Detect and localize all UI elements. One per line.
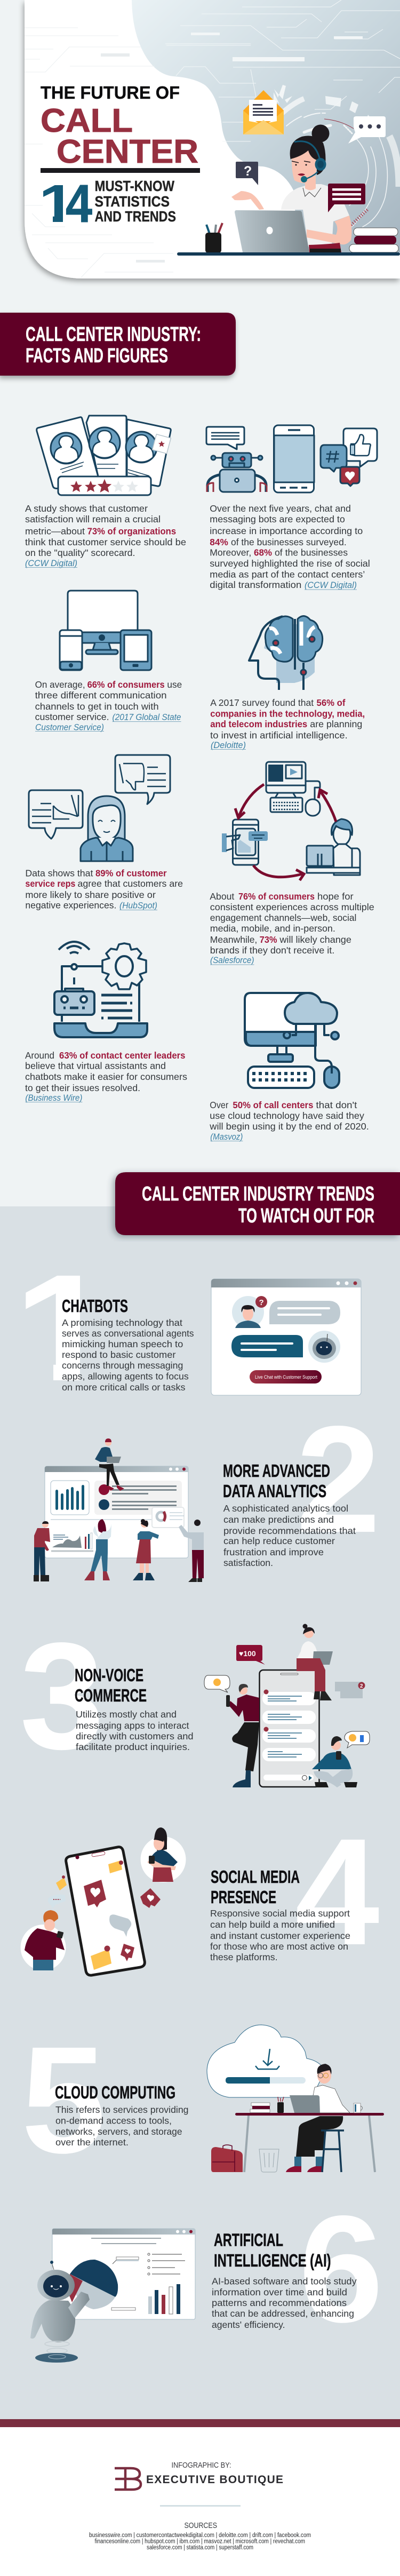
text block: (Masvoz) — [210, 1132, 243, 1142]
text block: This refers to services providing — [55, 2104, 189, 2115]
credit label: INFOGRAPHIC BY: — [172, 2461, 231, 2470]
text block: 89% of customer — [95, 868, 167, 878]
heading: NON-VOICE — [75, 1665, 143, 1685]
text block: agents' efficiency. — [212, 2319, 285, 2330]
text block: 84% — [210, 537, 228, 547]
text block: for those who are most active on — [210, 1941, 348, 1952]
man pointing — [179, 1520, 204, 1582]
text block: to invest in artificial intelligence. — [210, 730, 348, 741]
heading: SOCIAL MEDIA — [211, 1867, 300, 1887]
circuit decoration — [25, 0, 400, 277]
banner: facts heading — [0, 313, 236, 376]
illustration: agent — [231, 125, 351, 252]
heart notification: ♥100 — [239, 1649, 256, 1658]
text block: use cloud technology have said they — [210, 1110, 364, 1121]
title: MUST-KNOW — [95, 178, 174, 194]
banner: facts heading: CALL CENTER INDUSTRY: — [26, 323, 201, 346]
icon: books — [349, 228, 398, 252]
panel: channels fact — [35, 591, 182, 732]
text block: can help reduce customer — [223, 1536, 335, 1546]
text block: that can be addressed, enhancing — [212, 2308, 354, 2319]
desk — [235, 2113, 384, 2172]
text block: 73% — [260, 934, 277, 945]
illustration: chat window: ? — [259, 1298, 264, 1307]
text block — [55, 2104, 189, 2148]
illustration: social phone — [20, 1827, 186, 1975]
text block: 63% of contact center leaders — [59, 1050, 186, 1061]
sources heading: SOURCES — [185, 2521, 217, 2530]
woman seated on phone — [297, 1624, 333, 1700]
text block: messaging apps to interact — [76, 1720, 189, 1731]
sources list: businesswire.com | customercontactweekdigital.com | deloitte.com | drift.com | facebook.com — [89, 2532, 311, 2539]
text block: AI-based software and tools study — [212, 2276, 357, 2287]
woman in skirt — [133, 1519, 159, 1580]
cloud with download — [207, 2025, 325, 2097]
arrows: maroon cycle — [235, 784, 336, 880]
text block: patterns and recommendations — [212, 2297, 347, 2308]
text block: think that customer service should be — [25, 537, 186, 547]
text block: provide recommendations that — [223, 1525, 356, 1536]
sources list: salesforce.com | statista.com | superstaff.com — [147, 2545, 253, 2551]
icon: reps and reviews — [29, 755, 170, 861]
man sitting on floor — [312, 1736, 357, 1787]
text block — [25, 503, 186, 568]
illustration: cloud worker — [207, 2025, 384, 2172]
text block: Data shows that — [25, 868, 93, 878]
text block: and instant customer experience — [210, 1930, 350, 1941]
text block: believe that virtual assistants and — [25, 1061, 166, 1071]
text block: information over time and build — [212, 2287, 347, 2297]
text block: on more critical calls or tasks — [62, 1382, 186, 1393]
text block: hope for — [317, 891, 354, 902]
text block — [209, 1100, 369, 1142]
phone — [66, 1847, 145, 1975]
text block: frustration and improve — [223, 1547, 324, 1557]
icon: bot, phone and social — [206, 425, 377, 492]
text block — [223, 1503, 356, 1568]
text block: these platforms. — [210, 1952, 278, 1962]
text block: Moreover, — [210, 547, 251, 558]
illustration: phone with people — [204, 1624, 370, 1787]
panel: AI investment fact — [210, 616, 365, 750]
number 1: 1 — [13, 1243, 115, 1413]
heading: CLOUD COMPUTING — [55, 2082, 175, 2102]
text block: 73% of organizations — [87, 526, 176, 537]
text block: Over the next five years, chat and — [210, 503, 351, 514]
panel: hero — [25, 0, 400, 279]
title: AND TRENDS — [95, 208, 176, 225]
heading: COMMERCE — [75, 1685, 147, 1705]
man at desk — [286, 2064, 350, 2172]
text block: on-demand access to tools, — [55, 2115, 172, 2126]
text block: (Business Wire) — [25, 1093, 82, 1103]
title: CENTER — [57, 133, 198, 170]
text block — [25, 868, 183, 910]
text block — [76, 1709, 194, 1752]
text block — [62, 1317, 194, 1393]
text block: satisfaction. — [223, 1557, 273, 1568]
panel: trend 1 chatbots — [26, 1275, 362, 1396]
text block: companies in the technology, media, — [210, 709, 365, 719]
hero card — [25, 0, 400, 279]
text block: chatbots make it easier for consumers — [25, 1071, 187, 1082]
text block: can help build a more unified — [210, 1919, 335, 1930]
books, cup and pens — [250, 2097, 363, 2113]
text block — [212, 2276, 357, 2330]
icon: rating cards — [37, 416, 171, 495]
icon: question bubble — [236, 162, 258, 185]
heading: ARTIFICIAL — [214, 2230, 283, 2249]
text block: About — [210, 891, 234, 902]
text block: (Deloitte) — [211, 741, 246, 750]
man on laptop — [95, 1438, 124, 1491]
text block: Around — [25, 1050, 54, 1061]
robot — [30, 2261, 90, 2363]
text block: 50% of call centers — [233, 1100, 314, 1110]
button — [250, 1370, 322, 1384]
text block: (CCW Digital) — [25, 559, 77, 568]
text block: on the "quality" scorecard. — [25, 547, 135, 558]
text block: channels to get in touch with — [35, 701, 159, 712]
text block — [210, 697, 365, 750]
text block: will begin using it by the end of 2020. — [209, 1121, 369, 1132]
text block: Responsive social media support — [210, 1908, 350, 1919]
heading — [211, 1867, 300, 1907]
text block: concerns through messaging — [62, 1360, 183, 1371]
icon: maroon message bubble — [328, 184, 365, 212]
envelope badge: 2 — [360, 1683, 363, 1689]
text block: On average, — [35, 679, 85, 690]
text block: serves as conversational agents — [62, 1328, 194, 1339]
logo name: EXECUTIVE BOUTIQUE — [146, 2474, 283, 2486]
text block: facilitate product inquiries. — [76, 1742, 190, 1752]
text block: increase in importance according to — [210, 526, 363, 536]
text block: mimicking human speech to — [62, 1339, 183, 1349]
heading: PRESENCE — [211, 1887, 276, 1907]
sources list: financesonline.com | hubspot.com | ibm.com | masvoz.net | microsoft.com | revechat.com — [95, 2539, 305, 2545]
phone — [259, 1670, 319, 1787]
text block: 76% of consumers — [238, 891, 315, 902]
panel: trend 2 analytics — [34, 1395, 381, 1582]
text block: that don't — [316, 1100, 357, 1110]
text block: Utilizes mostly chat and — [76, 1709, 177, 1720]
panel: trend 6 AI — [30, 2184, 383, 2363]
logo mark — [115, 2468, 141, 2490]
title — [41, 86, 200, 222]
text block: service reps — [25, 878, 76, 889]
icon: question bubble: ? — [244, 164, 252, 179]
illustration: chat window — [211, 1279, 361, 1395]
desk — [177, 252, 400, 256]
text block: agree that customers are — [78, 878, 183, 889]
text block: 56% of — [317, 697, 346, 708]
text block: engagement channels—web, social — [210, 912, 356, 923]
text block: 68% — [254, 547, 272, 558]
heading — [75, 1665, 147, 1705]
text block: messaging bots are expected to — [210, 514, 345, 524]
number 6: 6 — [299, 2184, 383, 2354]
heading: INTELLIGENCE (AI) — [214, 2251, 331, 2270]
banner: trends heading — [115, 1172, 400, 1235]
laptop on desk — [290, 2095, 320, 2113]
panel: trend 4 social media — [20, 1807, 380, 1977]
divider — [160, 2505, 241, 2507]
heading — [223, 1461, 330, 1501]
text block: negative experiences. — [25, 900, 116, 910]
text block: directly with customers and — [76, 1731, 194, 1742]
man with phone — [25, 1910, 65, 1970]
text block: can make predictions and — [223, 1514, 334, 1525]
title: 1 — [38, 174, 76, 234]
heading: DATA ANALYTICS — [223, 1481, 326, 1501]
panel: satisfaction fact — [25, 416, 186, 568]
sources list — [89, 2532, 311, 2551]
text block: and telecom industries — [210, 719, 307, 729]
title: STATISTICS — [95, 193, 170, 210]
woman with phone — [147, 1827, 178, 1882]
icon: dots bubble — [348, 116, 386, 144]
text block — [210, 891, 374, 965]
text block: surveyed highlighted the rise of social — [210, 558, 370, 569]
text block: Meanwhile, — [210, 934, 257, 945]
number 5: 5 — [21, 2015, 106, 2185]
text block: networks, servers, and storage — [55, 2126, 182, 2137]
bin — [259, 2149, 279, 2172]
text block: of the businesses — [275, 547, 348, 558]
text block: brands if they don't receive it. — [210, 945, 334, 956]
text block: 66% of consumers — [87, 679, 165, 690]
text block: (HubSpot) — [119, 901, 157, 910]
title: CALL — [41, 102, 133, 139]
text block — [25, 1050, 187, 1103]
icon: pen cup — [205, 223, 222, 253]
envelope badge — [335, 1682, 365, 1698]
woman reaching — [84, 1519, 111, 1580]
number 2: 2 — [296, 1395, 381, 1564]
text block: (Salesforce) — [210, 956, 254, 965]
man with chart — [34, 1521, 50, 1581]
emoji bubbles — [204, 1675, 370, 1748]
text block: (CCW Digital) — [305, 581, 357, 590]
text block — [210, 1908, 350, 1962]
text block: will likely change — [279, 934, 351, 945]
footer bar — [0, 2419, 400, 2427]
text block: satisfaction will remain a crucial — [25, 514, 161, 524]
number 4: 4 — [295, 1807, 380, 1977]
icon: omnichannel cycle — [222, 762, 360, 875]
button: Live Chat with Customer Support — [255, 1374, 317, 1380]
text block: media, mobile, and in-person. — [210, 923, 335, 934]
dashboard window — [45, 1466, 188, 1558]
panel: trend 5 cloud computing — [21, 2015, 384, 2185]
panel: cloud fact — [209, 993, 369, 1142]
text block: consistent experiences across multiple — [210, 902, 374, 912]
text block: to get their issues resolved. — [25, 1083, 140, 1093]
text block: more likely to share positive or — [25, 889, 156, 900]
backing circles — [20, 1836, 186, 1970]
panel: virtual assistants fact — [25, 942, 187, 1103]
text block: (2017 Global State — [112, 713, 181, 722]
text block: of the businesses surveyed. — [231, 537, 347, 547]
text block: respond to basic customer — [62, 1349, 176, 1360]
number 3: 3 — [20, 1611, 105, 1781]
heading — [214, 2230, 331, 2270]
text block: three different communication — [35, 690, 167, 701]
panel: trend 3 non-voice commerce — [20, 1611, 370, 1787]
text block: apps, allowing agents to focus — [62, 1371, 189, 1382]
reactions — [48, 1851, 161, 1970]
briefcase — [211, 2145, 243, 2172]
title: 4 — [66, 174, 92, 234]
icon: envelope — [243, 85, 292, 134]
text block — [210, 503, 370, 590]
text block: A promising technology that — [62, 1317, 182, 1328]
text block: Over — [210, 1100, 228, 1110]
icon: cloud computer — [245, 993, 339, 1088]
text block: A study shows that customer — [25, 503, 148, 514]
panel: omnichannel fact — [210, 762, 374, 965]
illustration: AI dashboard — [30, 2229, 195, 2363]
text block: over the internet. — [55, 2137, 129, 2148]
arcs around agent — [275, 96, 399, 227]
text block: customer service. — [35, 712, 109, 722]
text block: A 2017 survey found that — [210, 697, 314, 708]
hero blue backdrop — [132, 0, 400, 252]
panel: footer credits — [89, 2461, 311, 2551]
panel: reps fact — [25, 755, 183, 910]
icon: devices — [60, 591, 151, 670]
heart notification — [236, 1645, 265, 1665]
man leaning — [226, 1684, 259, 1787]
icon: laptop — [235, 210, 309, 252]
text block: media as part of the contact centers’ — [210, 569, 365, 579]
panel: bots fact — [206, 425, 377, 590]
icon: brain and head — [249, 616, 323, 690]
text block — [35, 679, 182, 732]
heading: MORE ADVANCED — [223, 1461, 330, 1481]
window — [52, 2229, 195, 2319]
banner: facts heading: FACTS AND FIGURES — [26, 345, 168, 367]
icon: robot laptop — [54, 942, 147, 1037]
text block: Customer Service) — [35, 722, 104, 732]
illustration: analytics team — [34, 1438, 204, 1582]
text block: digital transformation — [210, 579, 301, 590]
text block: A sophisticated analytics tool — [223, 1503, 348, 1514]
text block: use — [167, 679, 182, 690]
heading: CHATBOTS — [62, 1296, 128, 1316]
text block: are planning — [310, 719, 362, 729]
title: THE FUTURE OF — [41, 83, 180, 102]
text block: metric—about — [25, 526, 85, 537]
